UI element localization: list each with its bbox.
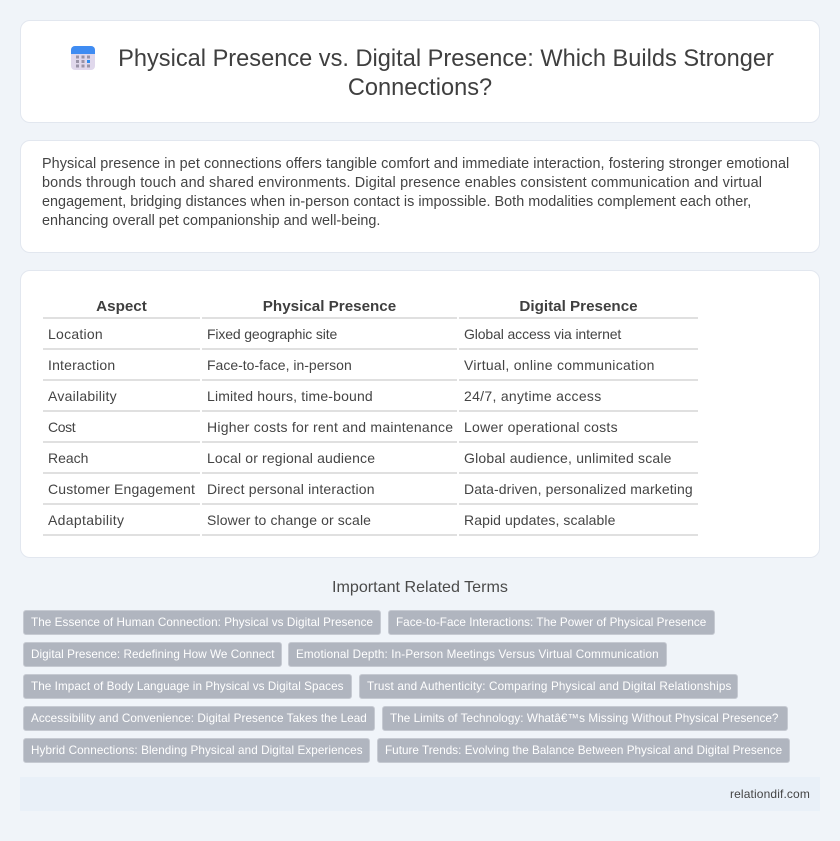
panel: title card <box>20 20 820 123</box>
tag: Trust and Authenticity: Comparing Physical and Digital Relationships <box>367 680 731 693</box>
comparison table <box>43 298 698 536</box>
tag <box>23 674 352 699</box>
tag: Digital Presence: Redefining How We Connect <box>31 648 275 661</box>
tag: The Impact of Body Language in Physical vs Digital Spaces <box>31 680 344 693</box>
title: Physical Presence vs. Digital Presence: Which Builds Stronger <box>118 46 774 72</box>
header: Digital Presence: Digital Presence <box>519 298 638 315</box>
row: Reach: Local or regional audience <box>207 450 375 466</box>
tag: Emotional Depth: In-Person Meetings Versus Virtual Communication <box>296 648 659 661</box>
row: Cost <box>48 419 618 435</box>
row: Reach: Global audience, unlimited scale <box>464 450 672 466</box>
row: Cost: Cost <box>48 419 75 435</box>
row: Cost: Lower operational costs <box>464 419 618 435</box>
row: Availability: Limited hours, time-bound <box>207 388 373 404</box>
row: Interaction: Interaction <box>48 357 115 373</box>
tag: Face-to-Face Interactions: The Power of Physical Presence <box>396 616 706 629</box>
header: Physical Presence: Physical Presence <box>263 298 396 315</box>
intro paragraph <box>42 156 789 229</box>
row: Reach: Reach <box>48 450 88 466</box>
tag: The Limits of Technology: Whatâ€™s Missing Without Physical Presence? <box>390 712 778 725</box>
icon: calendar <box>71 46 95 70</box>
title <box>118 46 774 101</box>
intro paragraph: engagement, bridging distances when in-person contact is impossible. Both modalities complement each other, <box>42 194 751 210</box>
tag <box>23 738 370 763</box>
tag: Hybrid Connections: Blending Physical and Digital Experiences <box>31 744 363 757</box>
row: Location: Location <box>48 326 103 342</box>
row: Location: Global access via internet <box>464 326 621 342</box>
related terms tags <box>23 610 790 763</box>
tag <box>23 706 375 731</box>
panel: intro paragraph card <box>20 140 820 253</box>
row: Adaptability: Adaptability <box>48 512 124 528</box>
row: Customer Engagement: Data-driven, personalized marketing <box>464 481 693 497</box>
footer bar <box>20 777 820 811</box>
row: Location <box>48 326 622 342</box>
tag <box>382 706 788 731</box>
tag: Accessibility and Convenience: Digital Presence Takes the Lead <box>31 712 367 725</box>
panel: comparison table card <box>20 270 820 558</box>
intro paragraph: enhancing overall pet companionship and well-being. <box>42 213 380 229</box>
tag: Future Trends: Evolving the Balance Between Physical and Digital Presence <box>385 744 782 757</box>
row: Interaction <box>48 357 655 373</box>
row: Interaction: Virtual, online communication <box>464 357 655 373</box>
tag <box>23 642 282 667</box>
tag <box>288 642 667 667</box>
row: Reach <box>48 450 672 466</box>
tag <box>359 674 738 699</box>
intro paragraph: Physical presence in pet connections offers tangible comfort and immediate interaction, fostering stronger emotional <box>42 156 789 172</box>
title: Connections? <box>348 75 492 101</box>
tag <box>377 738 790 763</box>
row: Adaptability <box>48 512 616 528</box>
tag <box>388 610 715 635</box>
header: Aspect: Aspect <box>96 298 147 315</box>
tag <box>23 610 381 635</box>
row: Adaptability: Slower to change or scale <box>207 512 371 528</box>
footer source text: relationdif.com <box>730 787 810 801</box>
row: Availability: 24/7, anytime access <box>464 388 602 404</box>
row: Location: Fixed geographic site <box>207 326 337 342</box>
row: Availability <box>48 388 602 404</box>
row: Availability: Availability <box>48 388 117 404</box>
intro paragraph: bonds through touch and shared environments. Digital presence enables consistent communication and virtual <box>42 175 762 191</box>
row: Adaptability: Rapid updates, scalable <box>464 512 616 528</box>
row: Customer Engagement: Direct personal interaction <box>207 481 375 497</box>
row: Customer Engagement <box>48 481 693 497</box>
row: Cost: Higher costs for rent and maintenance <box>207 419 453 435</box>
row: Interaction: Face-to-face, in-person <box>207 357 352 373</box>
heading: Important Related Terms: Important Related Terms <box>332 578 508 596</box>
row: Customer Engagement: Customer Engagement <box>48 481 195 497</box>
tag: The Essence of Human Connection: Physical vs Digital Presence <box>31 616 373 629</box>
